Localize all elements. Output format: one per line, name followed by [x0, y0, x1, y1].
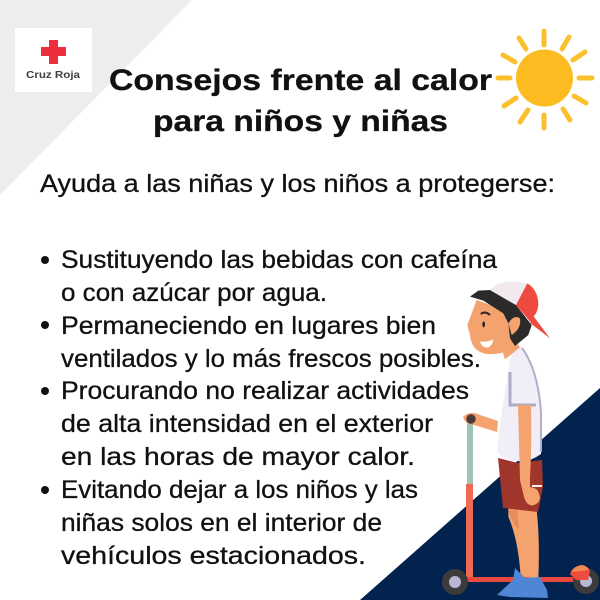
illustration: boy on a scooter	[442, 281, 599, 598]
smile	[480, 339, 493, 347]
bullet 4: vehículos: Evitando dejar a los niños y las	[61, 476, 418, 504]
logo: Cruz Roja: Cruz Roja	[26, 69, 80, 81]
bullet 3: actividades	[41, 377, 469, 471]
background: grey corner triangle	[0, 0, 192, 195]
bullet 4: vehículos	[41, 476, 418, 570]
eye and eyebrow	[482, 321, 485, 327]
back arm and hand	[463, 413, 498, 432]
background: navy corner triangle	[360, 388, 600, 600]
icon: sun	[498, 31, 592, 128]
title	[109, 64, 492, 138]
head	[467, 281, 550, 359]
bullet list	[41, 246, 497, 570]
bullet 3: actividades: de alta intensidad en el exterior	[61, 410, 433, 438]
bullet 3: actividades: Procurando no realizar actividades	[61, 377, 469, 405]
shorts cuff highlight	[532, 485, 542, 487]
scooter grip	[466, 414, 476, 424]
bullet 3: actividades: en las horas de mayor calor.	[61, 443, 415, 471]
neck and face	[503, 340, 520, 359]
subtitle: Ayuda a las niñas y los niños a protegerse:	[40, 170, 555, 198]
front arm	[518, 405, 540, 505]
cap crown	[490, 281, 527, 305]
shoe	[497, 568, 548, 598]
logo: Cruz Roja	[15, 28, 92, 92]
title: para niños y niñas	[153, 105, 448, 138]
bullet 1: bebidas: Sustituyendo las bebidas con cafeína	[61, 246, 497, 274]
bullet 4: vehículos: vehículos estacionados.	[61, 542, 366, 570]
title: Consejos frente al calor	[109, 64, 492, 97]
shirt	[497, 347, 541, 461]
scooter	[442, 416, 599, 595]
bullet 1: bebidas: o con azúcar por agua.	[61, 279, 327, 307]
bullet 4: vehículos: niñas solos en el interior de	[61, 509, 382, 537]
ear	[508, 317, 520, 335]
legs	[508, 507, 539, 578]
bullet 1: bebidas	[41, 246, 497, 307]
bullet 2: lugares ventilados: ventilados y lo más frescos posibles.	[61, 345, 481, 373]
cap visor	[531, 316, 550, 338]
bullet 2: lugares ventilados: Permaneciendo en lugares bien	[61, 312, 436, 340]
bullet 2: lugares ventilados	[41, 312, 481, 373]
hair	[470, 290, 532, 346]
shorts	[498, 458, 543, 512]
